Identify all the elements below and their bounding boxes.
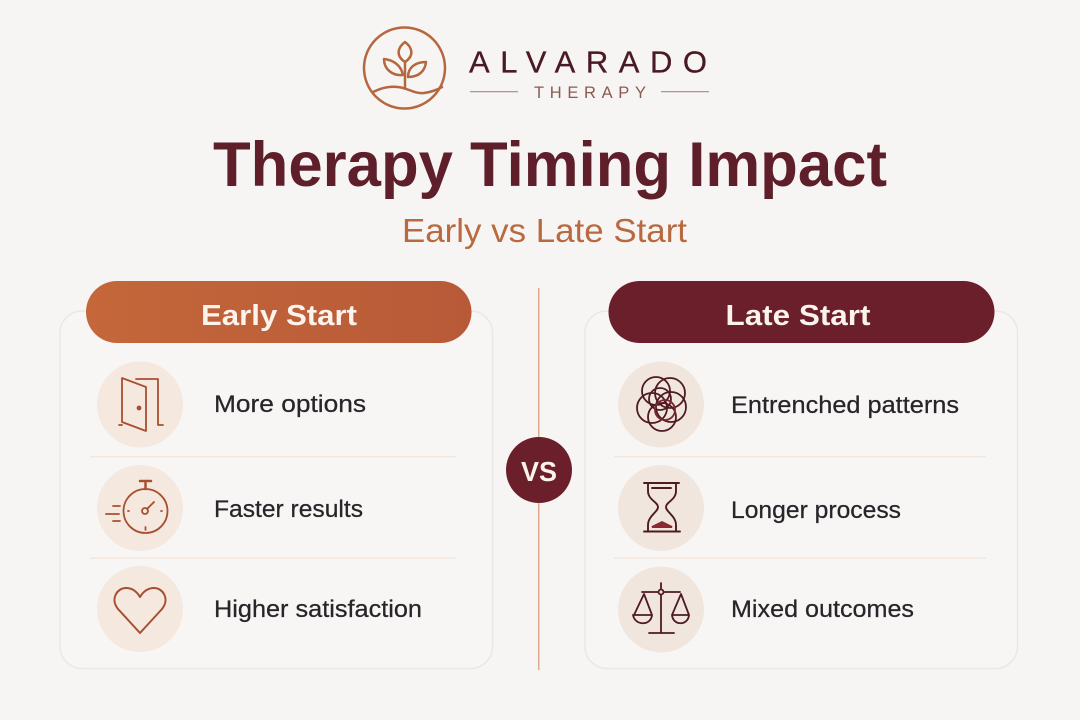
icon: open door (119, 378, 163, 431)
row: more options: More options (214, 391, 366, 418)
wordmark: ALVARADO (469, 44, 707, 80)
icon: stopwatch (106, 481, 168, 533)
row: entrenched patterns (618, 362, 959, 448)
vs badge: VS (521, 456, 557, 487)
icon: heart (114, 588, 166, 633)
sub wordmark: THERAPY (534, 84, 646, 102)
card (585, 311, 1018, 668)
row: faster results (97, 465, 363, 551)
icon: scales (633, 583, 689, 633)
header pill (86, 281, 472, 343)
row: longer process (618, 465, 901, 551)
title: Therapy Timing Impact (213, 130, 887, 200)
row: mixed outcomes (618, 566, 914, 652)
row: faster results: Faster results (214, 496, 363, 523)
card (60, 311, 492, 668)
vs badge (506, 437, 572, 503)
center divider (538, 288, 540, 670)
icon: sprout in circle (364, 28, 445, 108)
row: higher satisfaction (97, 566, 422, 652)
icon: tangled circles (637, 377, 686, 431)
panel: early start (60, 281, 492, 668)
row: longer process: Longer process (731, 497, 901, 524)
header pill (608, 281, 994, 343)
icon: hourglass (644, 483, 680, 532)
row: entrenched patterns: Entrenched patterns (731, 392, 959, 419)
subtitle: Early vs Late Start (402, 212, 687, 249)
row: higher satisfaction: Higher satisfaction (214, 596, 422, 623)
panel: late start (585, 281, 1018, 668)
header pill: Early Start (201, 300, 357, 332)
logo: Alvarado Therapy (364, 28, 709, 108)
row: mixed outcomes: Mixed outcomes (731, 596, 914, 623)
row: more options (97, 362, 366, 448)
header pill: Late Start (726, 300, 871, 332)
